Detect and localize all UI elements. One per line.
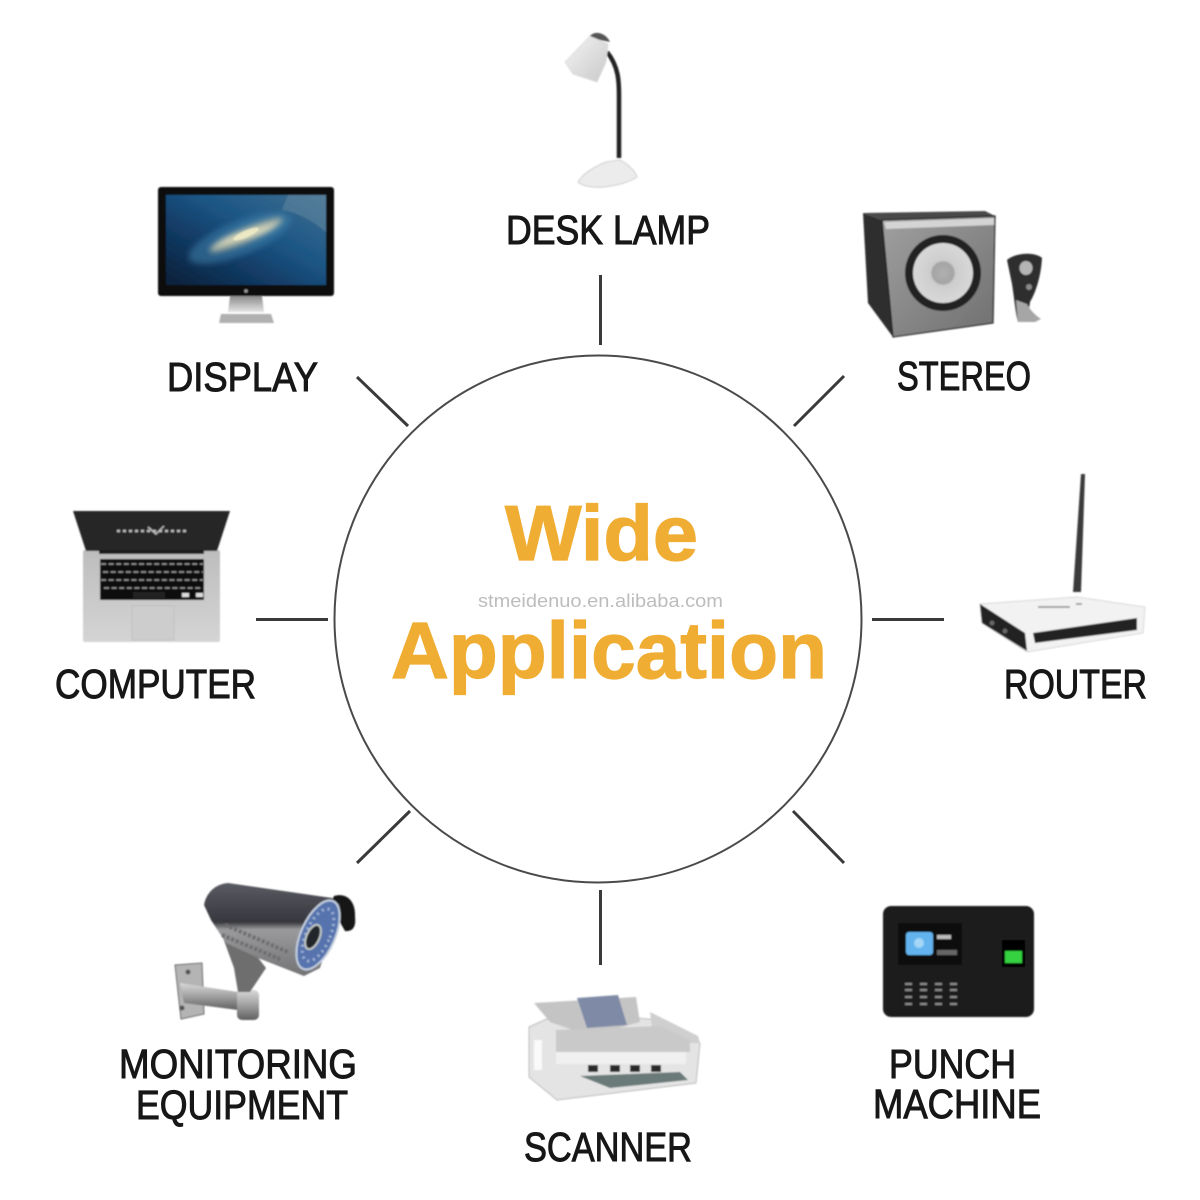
connector lines — [256, 275, 944, 965]
central circle — [334, 356, 862, 882]
label: scanner: SCANNER — [524, 1124, 692, 1170]
icon: monitoring camera — [175, 883, 355, 1020]
icon: desk lamp — [565, 33, 637, 187]
label: monitoring equipment — [119, 1041, 357, 1128]
icon: router — [980, 474, 1145, 652]
label: stereo: STEREO — [897, 353, 1031, 399]
icon: scanner — [529, 995, 700, 1100]
watermark: stmeidenuo.en.alibaba.com — [478, 591, 723, 611]
label: monitoring equipment: MONITORING — [119, 1041, 357, 1087]
label: punch machine: MACHINE — [873, 1081, 1041, 1127]
label: punch machine — [873, 1041, 1041, 1127]
label: punch machine: PUNCH — [889, 1041, 1016, 1087]
label: router: ROUTER — [1004, 661, 1147, 707]
central heading: Wide — [505, 489, 698, 577]
central heading: Application — [391, 606, 827, 695]
label: desk lamp: DESK LAMP — [506, 207, 710, 253]
label: computer: COMPUTER — [55, 661, 256, 707]
label: monitoring equipment: EQUIPMENT — [136, 1082, 348, 1128]
label: display: DISPLAY — [167, 354, 318, 400]
icon: display — [158, 187, 334, 323]
central heading — [391, 489, 827, 695]
icon: computer — [73, 511, 230, 642]
icon: punch machine — [883, 906, 1034, 1017]
icon: stereo — [863, 211, 1042, 337]
